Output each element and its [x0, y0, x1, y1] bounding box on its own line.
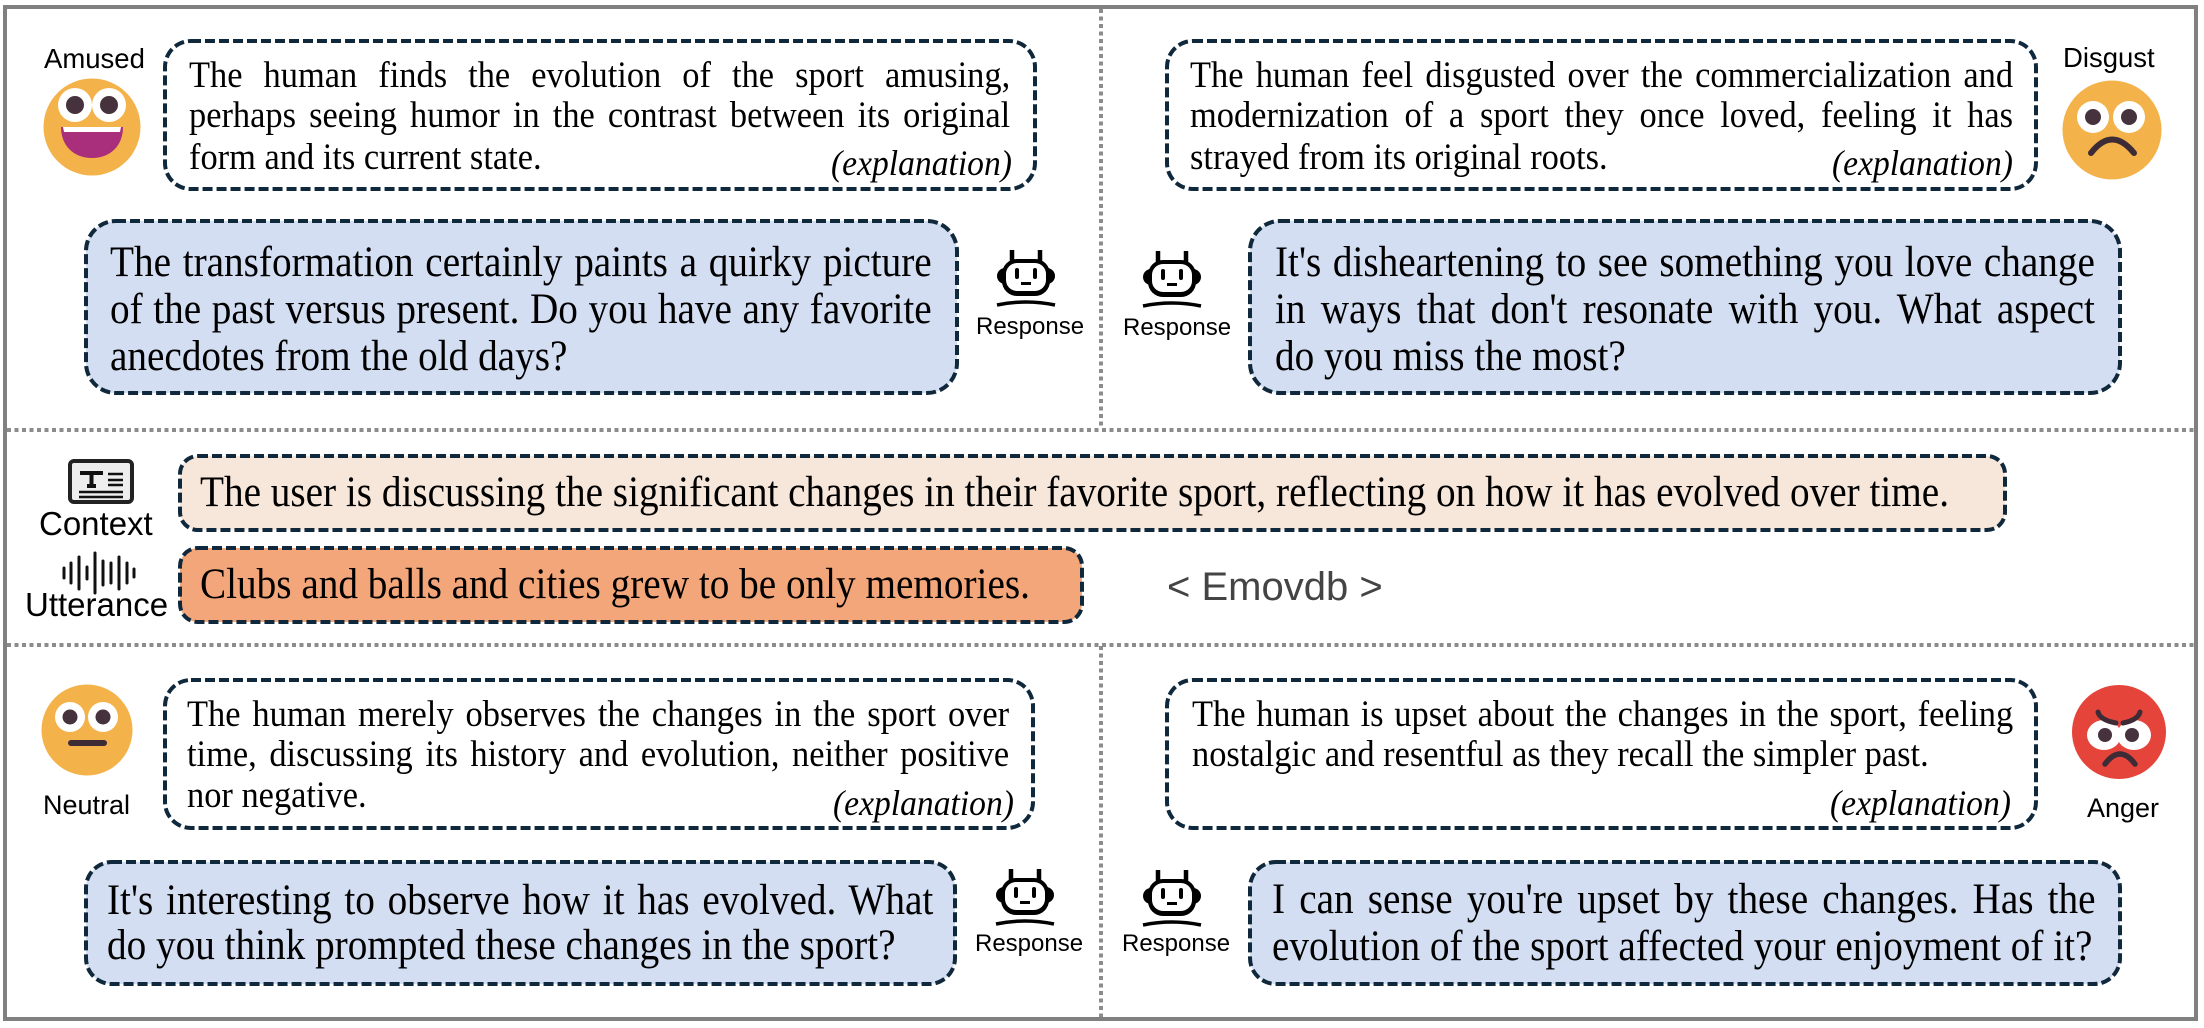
icon: utterance waveform	[62, 552, 136, 594]
panel: disgust response: in ways that don't resonate with you. What aspect	[1275, 286, 2095, 333]
label: Anger: Anger	[2087, 793, 2159, 823]
panel: neutral explanation: time, discussing its history and evolution, neither positive	[187, 734, 1009, 775]
panel: anger explanation: (explanation)	[1830, 783, 2011, 823]
panel: amused explanation: perhaps seeing humor in the contrast between its original	[189, 95, 1010, 136]
icon: neutral emoji	[42, 684, 132, 776]
label: response top right: Response	[1123, 314, 1231, 341]
panel: disgust response: It's disheartening to see something you love change	[1275, 239, 2095, 286]
label: Context: Context	[39, 505, 153, 542]
icon: robot top right	[1142, 251, 1202, 308]
icon: amused emoji	[44, 78, 140, 176]
panel: disgust response	[1248, 219, 2122, 395]
panel: neutral explanation: (explanation)	[833, 783, 1014, 823]
panel: neutral explanation: nor negative.	[187, 775, 367, 816]
panel: utterance: Clubs and balls and cities grew to be only memories.	[200, 561, 1030, 608]
label: Amused: Amused	[44, 43, 145, 74]
panel: anger explanation	[1165, 678, 2038, 830]
panel: disgust explanation: The human feel disgusted over the commercialization and	[1190, 55, 2013, 96]
panel: utterance	[178, 546, 1084, 624]
panel: amused response	[84, 219, 959, 395]
panel: anger explanation: nostalgic and resentful as they recall the simpler past.	[1192, 734, 1929, 775]
panel: disgust explanation	[1165, 39, 2038, 191]
panel: neutral explanation: The human merely observes the changes in the sport over	[187, 694, 1009, 735]
label: Neutral: Neutral	[43, 790, 130, 820]
panel: neutral response: do you think prompted these changes in the sport?	[107, 922, 896, 969]
panel: anger response: evolution of the sport affected your enjoyment of it?	[1272, 923, 2092, 970]
heading: dataset name: < Emovdb >	[1167, 565, 1383, 609]
panel: amused response: of the past versus present. Do you have any favorite	[110, 286, 932, 333]
label: response bottom right: Response	[1122, 930, 1230, 957]
panel: disgust explanation: modernization of a sport they once loved, feeling it has	[1190, 95, 2013, 136]
panel: neutral explanation	[163, 678, 1035, 830]
panel: neutral response: It's interesting to observe how it has evolved. What	[107, 877, 933, 924]
panel: amused explanation: (explanation)	[831, 143, 1012, 183]
label: response bottom left: Response	[975, 930, 1083, 957]
label: Utterance: Utterance	[25, 586, 168, 623]
panel: anger response	[1248, 860, 2122, 986]
panel: disgust explanation: strayed from its original roots.	[1190, 137, 1608, 178]
icon: anger emoji	[2072, 685, 2166, 779]
icon: robot bottom left	[996, 869, 1054, 926]
label: Disgust: Disgust	[2063, 42, 2155, 73]
icon: robot top left	[996, 250, 1056, 307]
panel: anger response: I can sense you're upset by these changes. Has the	[1272, 876, 2096, 923]
panel: amused response: anecdotes from the old days?	[110, 333, 567, 380]
panel: neutral response	[84, 860, 957, 986]
panel: context	[178, 454, 2007, 532]
panel: amused response: The transformation certainly paints a quirky picture	[110, 239, 932, 286]
panel: anger explanation: The human is upset about the changes in the sport, feeling	[1192, 694, 2013, 735]
icon: context document	[68, 459, 134, 504]
panel: amused explanation: form and its current state.	[189, 137, 542, 178]
panel: disgust explanation: (explanation)	[1832, 143, 2013, 183]
panel: disgust response: do you miss the most?	[1275, 333, 1626, 380]
panel: amused explanation: The human finds the evolution of the sport amusing,	[189, 55, 1010, 96]
label: response top left: Response	[976, 313, 1084, 340]
panel: amused explanation	[163, 39, 1037, 191]
panel: context: The user is discussing the significant changes in their favorite sport, reflecting on how it has evolved over time.	[200, 469, 1949, 516]
icon: disgust emoji	[2062, 80, 2162, 180]
icon: robot bottom right	[1142, 870, 1202, 927]
